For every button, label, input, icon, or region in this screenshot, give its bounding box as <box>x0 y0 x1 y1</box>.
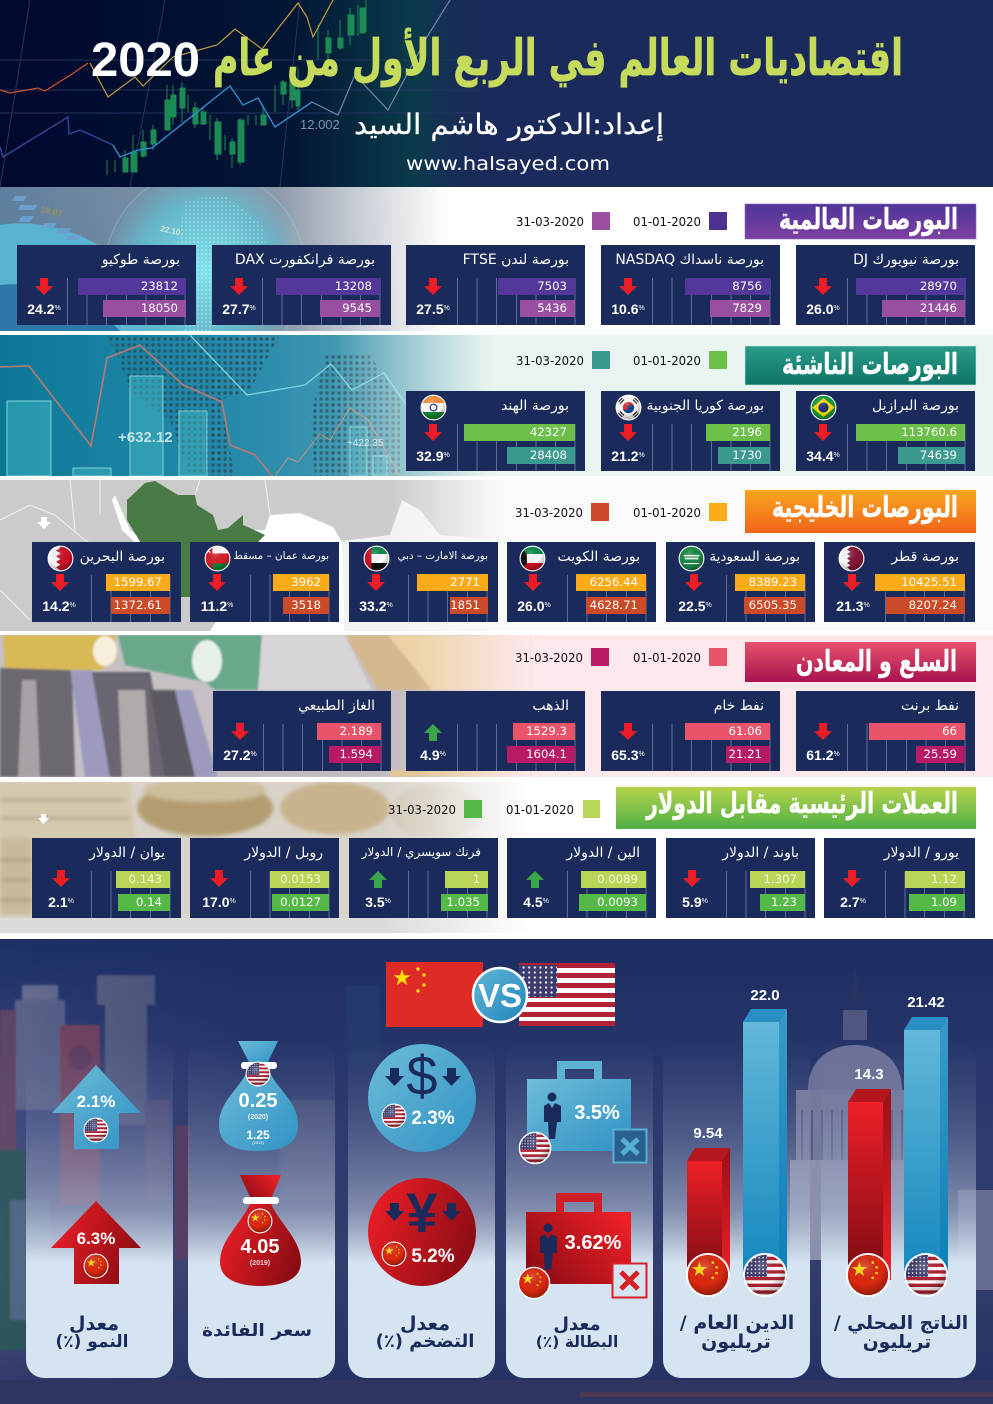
China debt bar <box>685 1125 731 1298</box>
card: Qatar: 10425.51 <box>901 575 957 589</box>
card: Crude oil: نفط خام <box>714 698 764 714</box>
card: Gold <box>406 691 585 771</box>
legend: emerging markets: 31-03-2020 <box>516 353 584 368</box>
US money bag: 1.25 <box>246 1128 270 1142</box>
US GDP bar <box>903 994 949 1298</box>
card: Swiss franc: 1.035 <box>447 895 480 909</box>
card: NASDAQ <box>601 245 780 325</box>
card: Tokyo: 18050 <box>141 301 178 315</box>
card: Brazil: 74639 <box>920 448 957 462</box>
card: Euro <box>824 838 975 918</box>
legend: commodities <box>515 648 727 666</box>
card: Yuan: 0.14 <box>136 895 162 909</box>
card: UAE: 1851 <box>450 598 480 612</box>
US briefcase <box>518 1061 646 1165</box>
US growth arrow: 2.1% <box>77 1092 115 1111</box>
China GDP bar: 14.3 <box>854 1066 884 1083</box>
card: Ruble: 0.0127 <box>280 895 321 909</box>
card: Oman <box>190 542 339 622</box>
card: Kuwait: 26.0% <box>517 598 551 614</box>
card: India: 42327 <box>530 425 567 439</box>
card: Yen: 0.0089 <box>597 872 638 886</box>
card: Euro: 1.09 <box>931 895 957 909</box>
author subtitle: إعداد:الدكتور هاشم السيد <box>354 108 664 141</box>
label: interest rate: سعر الفائدة <box>202 1321 312 1341</box>
legend: emerging markets <box>516 351 727 369</box>
section background: emerging markets chart <box>0 335 993 476</box>
card: New York DJ: 21446 <box>920 301 957 315</box>
section background: global markets globe: 18.07 <box>40 204 64 219</box>
label: GDP: الناتج المحلي / <box>834 1313 968 1334</box>
label: growth rate: معدل <box>69 1313 119 1335</box>
card: Gold: 1529.3 <box>526 724 567 738</box>
card: UAE: 2771 <box>450 575 480 589</box>
label: unemployment rate: البطالة (٪) <box>536 1333 618 1351</box>
label: inflation rate: التضخم (٪) <box>376 1331 474 1352</box>
panel: unemployment rate <box>506 1040 653 1378</box>
label: public debt: تريليون <box>701 1331 771 1353</box>
card: New York DJ: بورصة نيويورك DJ <box>853 252 959 268</box>
card: Crude oil <box>601 691 780 771</box>
card: South Korea: 1730 <box>732 448 762 462</box>
section background: currencies coins <box>0 782 508 933</box>
card: Bahrain: 1599.67 <box>114 575 162 589</box>
China inflation circle: 5.2% <box>411 1246 455 1267</box>
card: South Korea: 2196 <box>732 425 762 439</box>
legend: global markets: 01-01-2020 <box>633 214 701 229</box>
card: Crude oil: 21.21 <box>729 747 762 761</box>
card: Gold: 1604.1 <box>526 747 567 761</box>
China money bag: 4.05 <box>241 1236 279 1258</box>
label: unemployment rate: معدل <box>553 1314 601 1335</box>
card: Oman: 3962 <box>291 575 321 589</box>
card: Pound: باوند / الدولار <box>722 845 799 861</box>
card: Natural gas: 2.189 <box>340 724 373 738</box>
US growth arrow <box>52 1065 141 1149</box>
header background with stock chart <box>0 0 993 187</box>
section background: global markets globe: 22.10 <box>160 224 182 237</box>
card: Yen: 0.0093 <box>597 895 638 909</box>
label: inflation rate: معدل <box>400 1313 450 1335</box>
legend: currencies: 01-01-2020 <box>506 802 574 817</box>
card: Euro: 1.12 <box>931 872 957 886</box>
card: Bahrain: بورصة البحرين <box>80 549 165 565</box>
card: Swiss franc: 3.5% <box>365 894 391 910</box>
legend: global markets <box>516 212 727 230</box>
card: Yuan: 0.143 <box>129 872 162 886</box>
card: Tokyo <box>17 245 196 325</box>
card: Oman: بورصة عمان – مسقط <box>233 550 329 562</box>
US GDP bar: 21.42 <box>907 994 945 1011</box>
card: New York DJ: 26.0% <box>806 301 840 317</box>
panel: interest rate <box>188 1040 335 1378</box>
legend: gulf markets: 31-03-2020 <box>515 505 583 520</box>
card: Qatar: 8207.24 <box>909 598 957 612</box>
card: Qatar: 21.3% <box>836 598 870 614</box>
card: Brent oil: 61.2% <box>806 747 840 763</box>
US money bag: (2020) <box>248 1114 268 1121</box>
chart number: 12.002 <box>300 117 340 132</box>
card: NASDAQ: 7829 <box>732 301 762 315</box>
card: Ruble: 17.0% <box>202 894 236 910</box>
card: Yuan: 2.1% <box>48 894 74 910</box>
US debt bar <box>742 987 788 1298</box>
China inflation circle <box>368 1178 476 1286</box>
US inflation circle: 2.3% <box>411 1108 455 1129</box>
card: Bahrain: 1372.61 <box>114 598 162 612</box>
card: Saudi Arabia: بورصة السعودية <box>709 549 800 565</box>
card: Swiss franc: فرنك سويسري / الدولار <box>362 845 481 859</box>
card: Natural gas: الغاز الطبيعي <box>298 698 375 714</box>
comparison section background: city and capitol <box>0 939 993 1404</box>
card: Yen: الين / الدولار <box>566 845 640 861</box>
card: London FTSE: 5436 <box>537 301 567 315</box>
legend: currencies <box>388 800 600 818</box>
flag: China <box>386 962 483 1027</box>
panel: GDP <box>821 994 976 1378</box>
legend: currencies: 31-03-2020 <box>388 802 456 817</box>
section title: commodities <box>745 642 976 682</box>
panel: inflation rate <box>348 1040 495 1378</box>
card: Brent oil: 66 <box>942 724 957 738</box>
card: Kuwait: 4628.71 <box>590 598 638 612</box>
card: Frankfurt DAX: 9545 <box>342 301 372 315</box>
card: Frankfurt DAX: بورصة فرانكفورت DAX <box>235 252 375 268</box>
card: Brent oil: 25.59 <box>924 747 957 761</box>
card: Euro: يورو / الدولار <box>884 845 959 861</box>
US inflation circle <box>368 1044 476 1152</box>
card: Ruble: روبل / الدولار <box>244 845 323 861</box>
flag: USA <box>519 963 615 1026</box>
China growth arrow <box>51 1201 141 1284</box>
card: Yuan <box>32 838 181 918</box>
section background: emerging markets chart: +632.12 <box>118 429 173 446</box>
section background: gulf map <box>0 480 492 631</box>
card: Bahrain: 14.2% <box>42 598 76 614</box>
card: UAE: بورصة الامارت – دبي <box>398 550 488 562</box>
card: Pound <box>666 838 815 918</box>
China briefcase <box>517 1193 646 1300</box>
card: Tokyo: 23812 <box>141 279 178 293</box>
card: India <box>406 391 585 471</box>
section background: commodities <box>0 635 993 777</box>
card: Gold: 4.9% <box>420 747 446 763</box>
VS badge: VS <box>478 977 522 1014</box>
card: Yen: 4.5% <box>523 894 549 910</box>
card: Pound: 1.307 <box>764 872 797 886</box>
card: Pound: 1.23 <box>771 895 797 909</box>
US inflation circle: $ <box>406 1044 438 1107</box>
card: Kuwait <box>507 542 656 622</box>
card: Brent oil: نفط برنت <box>901 698 959 714</box>
card: Saudi Arabia <box>666 542 815 622</box>
card: South Korea: بورصة كوريا الجنوبية <box>646 398 764 414</box>
China briefcase: 3.62% <box>565 1232 622 1254</box>
card: Tokyo: بورصة طوكيو <box>102 252 180 268</box>
card: Frankfurt DAX <box>212 245 391 325</box>
China money bag <box>220 1175 301 1286</box>
label: public debt: الدين العام / <box>680 1312 794 1334</box>
card: Saudi Arabia: 6505.35 <box>749 598 797 612</box>
legend: gulf markets <box>515 503 727 521</box>
card: Swiss franc <box>349 838 498 918</box>
card: Gold: الذهب <box>532 698 569 714</box>
legend: commodities: 01-01-2020 <box>633 650 701 665</box>
card: India: 32.9% <box>416 448 450 464</box>
card: Saudi Arabia: 8389.23 <box>749 575 797 589</box>
legend: gulf markets: 01-01-2020 <box>633 505 701 520</box>
card: UAE: 33.2% <box>359 598 393 614</box>
VS badge <box>473 968 527 1022</box>
section background: emerging markets chart: +422.35 <box>347 438 384 449</box>
card: Kuwait: 6256.44 <box>590 575 638 589</box>
card: Pound: 5.9% <box>682 894 708 910</box>
section title: emerging markets <box>745 346 976 385</box>
card: Crude oil: 61.06 <box>729 724 762 738</box>
card: NASDAQ: 10.6% <box>611 301 645 317</box>
card: Yen <box>507 838 656 918</box>
legend: global markets: 31-03-2020 <box>516 214 584 229</box>
card: Swiss franc: 1 <box>473 872 480 886</box>
China GDP bar <box>845 1066 891 1298</box>
card: New York DJ: 28970 <box>920 279 957 293</box>
card: Brazil: 34.4% <box>806 448 840 464</box>
China debt bar: 9.54 <box>693 1125 723 1142</box>
card: Natural gas: 1.594 <box>340 747 373 761</box>
card: New York DJ <box>796 245 975 325</box>
legend: emerging markets: 01-01-2020 <box>633 353 701 368</box>
panel: growth rate <box>26 1040 173 1378</box>
card: Qatar <box>824 542 975 622</box>
card: Kuwait: بورصة الكويت <box>558 549 640 565</box>
card: Natural gas <box>213 691 391 771</box>
US money bag: 0.25 <box>239 1090 277 1112</box>
panel: public debt <box>663 987 810 1378</box>
card: Saudi Arabia: 22.5% <box>678 598 712 614</box>
card: Ruble <box>190 838 339 918</box>
card: UAE <box>349 542 498 622</box>
card: Natural gas: 27.2% <box>223 747 257 763</box>
label: growth rate: النمو (٪) <box>55 1332 129 1352</box>
card: Tokyo: 24.2% <box>27 301 61 317</box>
card: NASDAQ: 8756 <box>732 279 762 293</box>
card: Euro: 2.7% <box>840 894 866 910</box>
card: Brazil: بورصة البرازيل <box>872 398 959 414</box>
card: Brazil: 113760.6 <box>901 425 957 439</box>
card: Brazil <box>796 391 975 471</box>
card: South Korea <box>601 391 780 471</box>
US briefcase: 3.5% <box>574 1102 620 1124</box>
card: South Korea: 21.2% <box>611 448 645 464</box>
card: London FTSE: 27.5% <box>416 301 450 317</box>
card: India: بورصة الهند <box>501 398 569 414</box>
card: London FTSE: بورصة لندن FTSE <box>463 252 569 268</box>
section title: gulf markets <box>745 490 976 533</box>
card: Brent oil <box>796 691 975 771</box>
legend: commodities: 31-03-2020 <box>515 650 583 665</box>
China inflation circle: ¥ <box>406 1181 438 1244</box>
card: London FTSE: 7503 <box>537 279 567 293</box>
card: Frankfurt DAX: 27.7% <box>222 301 256 317</box>
card: India: 28408 <box>530 448 567 462</box>
card: Yuan: يوان / الدولار <box>89 845 165 861</box>
label: GDP: تريليون <box>863 1332 931 1353</box>
website url: www.halsayed.com <box>406 153 610 175</box>
card: Bahrain <box>32 542 181 622</box>
US money bag <box>219 1041 298 1151</box>
card: NASDAQ: بورصة ناسداك NASDAQ <box>615 252 764 268</box>
card: Frankfurt DAX: 13208 <box>335 279 372 293</box>
card: Oman: 11.2% <box>201 598 233 614</box>
China money bag: (2019) <box>250 1260 270 1267</box>
US money bag: (2019) <box>252 1140 264 1145</box>
card: Qatar: بورصة قطر <box>891 549 959 565</box>
section title: currencies <box>616 786 976 829</box>
section background: global markets globe <box>0 187 436 331</box>
card: London FTSE <box>406 245 585 325</box>
card: Oman: 3518 <box>291 598 321 612</box>
card: Crude oil: 65.3% <box>611 747 645 763</box>
US debt bar: 22.0 <box>750 987 780 1004</box>
card: Ruble: 0.0153 <box>280 872 321 886</box>
main title: 2020 <box>91 34 200 87</box>
China growth arrow: 6.3% <box>77 1229 115 1248</box>
